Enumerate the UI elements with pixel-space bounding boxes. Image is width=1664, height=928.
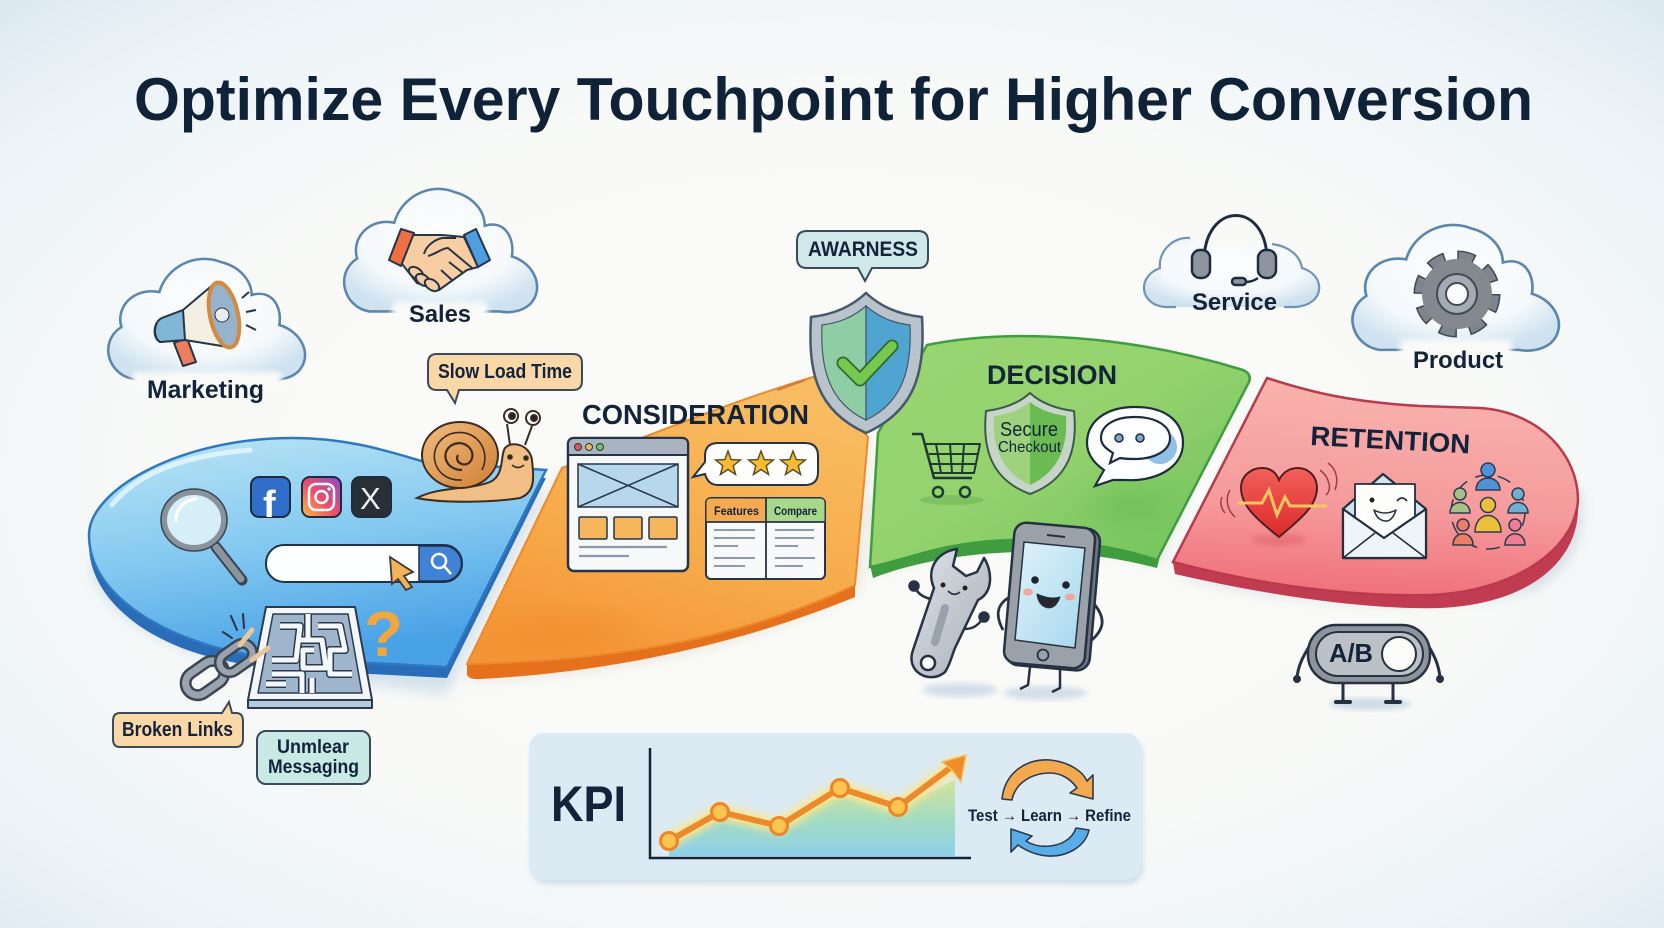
heading: DECISION: DECISION — [987, 360, 1117, 390]
icon: handshake — [389, 229, 490, 294]
callout: Unclear Messaging: Messaging — [268, 757, 359, 778]
icon: maze — [248, 607, 372, 708]
callout: Slow Load Time — [428, 354, 582, 403]
panel: KPI — [529, 733, 1143, 884]
icon: shopping cart — [912, 434, 984, 505]
icon: gear — [1420, 257, 1494, 331]
icon: Facebook: f — [263, 484, 276, 526]
icon: magnifier — [161, 489, 242, 580]
icon: secure checkout shield: Secure — [1000, 419, 1058, 441]
comparison table: Features — [714, 504, 759, 518]
icon: X: X — [360, 481, 381, 516]
character: A/B toggle — [1294, 625, 1444, 710]
label: Service — [1192, 289, 1277, 316]
callout: Broken Links — [113, 702, 243, 747]
comparison table: Compare — [774, 504, 817, 518]
line chart — [650, 748, 971, 858]
cloud: Marketing — [108, 259, 305, 404]
callout: Unclear Messaging — [257, 731, 370, 784]
heading: CONSIDERATION: CONSIDERATION — [582, 399, 809, 430]
icon: secure checkout shield — [985, 393, 1075, 494]
panel: decision funnel band (green) — [870, 336, 1250, 578]
icon: heart with pulse — [1221, 463, 1337, 546]
panel: awareness funnel band (blue) — [89, 438, 546, 695]
callout: Broken Links: Broken Links — [122, 719, 233, 741]
icon: Instagram — [302, 477, 341, 517]
search bar — [266, 545, 462, 590]
icon: chat bubbles — [1087, 407, 1183, 486]
icon: browser wireframe — [568, 438, 688, 571]
icon: snail — [417, 409, 540, 502]
icon: cursor — [390, 557, 413, 590]
character: wrench — [910, 549, 998, 697]
icon: refine cycle arrows — [1002, 760, 1093, 856]
panel: consideration funnel band (orange) — [467, 377, 868, 680]
icon: star rating bubble — [693, 443, 818, 485]
icon: smiling envelope — [1343, 474, 1426, 558]
comparison table — [706, 498, 825, 579]
cloud: Service — [1144, 216, 1319, 316]
callout: AWARNESS — [797, 231, 928, 281]
label: Product — [1413, 347, 1503, 374]
loop caption: Test → Learn → Refine — [968, 806, 1131, 825]
cloud: Sales — [344, 189, 537, 328]
icon: megaphone — [155, 280, 256, 366]
cloud: Product — [1352, 225, 1559, 374]
heading: RETENTION: RETENTION — [1310, 421, 1471, 459]
icon: headset — [1192, 216, 1276, 285]
icon: Facebook — [251, 477, 290, 526]
callout: Unclear Messaging: Unmlear — [277, 737, 350, 758]
label: Marketing — [147, 376, 264, 404]
icon: secure checkout shield: Checkout — [998, 439, 1062, 456]
icon: community of people — [1450, 463, 1528, 549]
character: A/B toggle: A/B — [1329, 638, 1373, 668]
panel: retention funnel band (red) — [1173, 378, 1581, 608]
character: smartphone — [998, 522, 1102, 700]
KPI label: KPI — [551, 776, 626, 832]
callout: Slow Load Time: Slow Load Time — [438, 361, 572, 383]
icon: broken chain — [181, 614, 268, 700]
callout: AWARNESS: AWARNESS — [808, 238, 918, 261]
icon: question mark: ? — [364, 598, 403, 670]
label: Sales — [409, 301, 471, 328]
title: Optimize Every Touchpoint for Higher Conversion — [134, 66, 1533, 133]
icon: X — [352, 477, 391, 517]
icon: trust shield with check — [810, 293, 923, 433]
